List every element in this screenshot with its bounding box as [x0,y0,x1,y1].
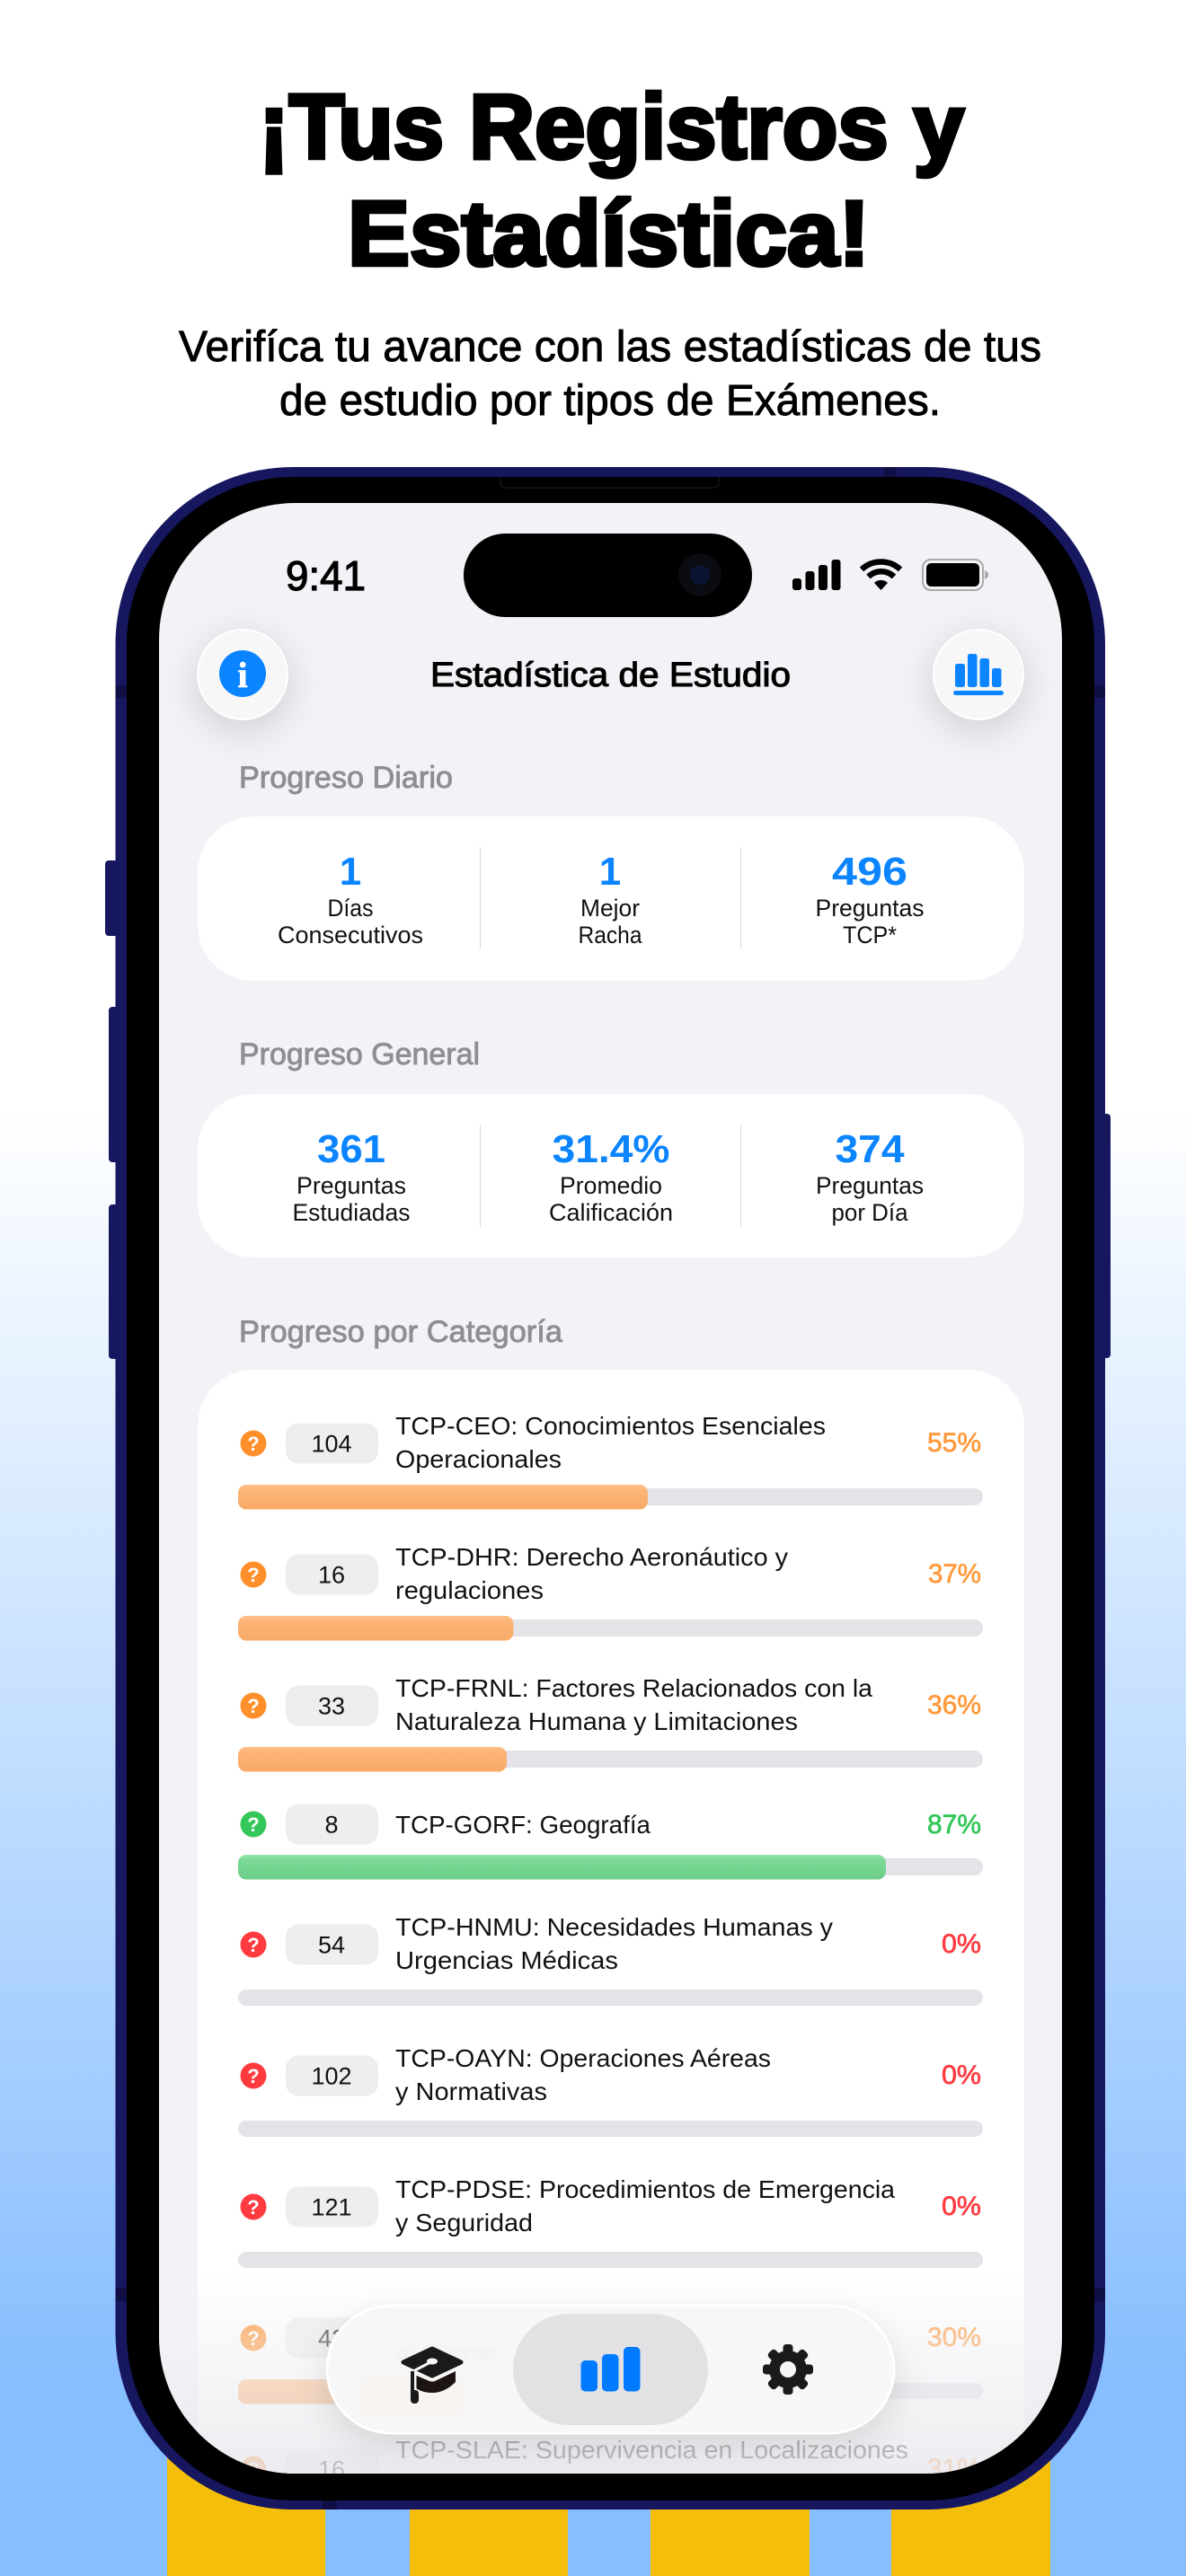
row: TCP-FRNL: Naturaleza Humana y Limitaciones [395,1707,798,1735]
info button [196,630,289,731]
panel: progreso por categoria [198,1370,1024,2537]
icon: wifi [862,562,900,590]
row: TCP-FRNL [238,1674,983,1771]
row: TCP-HNMU: Urgencias Médicas [395,1946,618,1974]
row: TCP-CEO: 104 [311,1430,352,1457]
panel: progreso general: 361 [317,1127,385,1171]
panel: progreso general [198,1094,1024,1257]
row: TCP-DHR: 16 [318,1561,345,1588]
subtitle: de estudio por tipos de Exámenes. [279,377,941,425]
row: TCP-OAYN [238,2044,983,2137]
row: TCP-CEO: 55% [927,1428,981,1458]
icon: signal [792,560,841,590]
row: TCP-SLAE: ? [247,2458,260,2481]
panel: progreso diario: 1 [340,850,361,894]
row: TCP-DHR: 37% [928,1559,981,1589]
row: TCP-OAYN: 102 [311,2062,352,2089]
panel: progreso general: 31.4% [552,1127,670,1171]
phone side buttons [105,860,1111,1359]
row: partially hidden category [238,2317,983,2404]
row: TCP-DHR: TCP-DHR: Derecho Aeronáutico y [395,1543,788,1571]
row: TCP-OAYN: ? [247,2065,260,2087]
row: TCP-GORF [238,1804,983,1879]
panel: progreso diario: TCP* [843,922,897,948]
phone screen [159,503,1062,2537]
dynamic island [464,534,752,617]
panel: progreso diario: 1 [599,850,621,894]
panel: progreso diario: Mejor [580,895,640,922]
row: TCP-CEO: ? [247,1433,260,1455]
panel: progreso general: por Día [832,1199,908,1226]
row: TCP-DHR: regulaciones [395,1576,544,1604]
row: TCP-CEO [238,1412,983,1509]
row: partially hidden category: 30% [927,2323,981,2352]
row: TCP-FRNL: 33 [318,1692,345,1719]
row: TCP-GORF: ? [247,1813,260,1836]
statistics button [932,630,1025,731]
row: TCP-SLAE: 16 [318,2456,345,2483]
title: Estadística! [348,182,870,285]
panel: progreso general: Preguntas [296,1172,406,1199]
panel: progreso diario: Días [327,895,374,922]
phone frame [115,467,1105,2510]
row: TCP-OAYN: TCP-OAYN: Operaciones Aéreas [395,2044,771,2072]
row: TCP-FRNL: TCP-FRNL: Factores Relacionados con la [395,1674,872,1702]
row: TCP-SLAE: 31% [927,2454,981,2483]
title [259,75,964,285]
bottom fade [159,2325,1062,2474]
panel: progreso general: Preguntas [816,1172,924,1199]
panel: progreso general: Promedio [560,1172,662,1199]
icon: battery [923,560,988,590]
panel: progreso diario [198,816,1024,981]
row: TCP-GORF: 87% [927,1810,981,1839]
row: TCP-PDSE: ? [247,2196,260,2219]
row: TCP-DHR [238,1543,983,1640]
panel: progreso general: Calificación [549,1199,673,1226]
heading: progreso diario: Progreso Diario [239,761,453,795]
row: TCP-OAYN: y Normativas [395,2078,547,2105]
row: TCP-HNMU: 0% [942,1929,981,1959]
row: TCP-HNMU [238,1913,983,2006]
selected tab background [513,2314,708,2425]
panel: progreso general: Estudiadas [293,1199,410,1226]
status bar time: 9:41 [286,552,366,599]
heading: progreso general: Progreso General [239,1037,480,1072]
panel: progreso diario: Preguntas [816,895,924,922]
row: partially hidden category: 42 [318,2325,345,2351]
tab bar: al Cliente [396,2339,498,2366]
row: TCP-SLAE [243,2440,978,2474]
panel: progreso general: 374 [836,1127,905,1171]
row: TCP-SLAE: TCP-SLAE: Supervivencia en Localizaciones [395,2436,908,2464]
title: ¡Tus Registros y [259,75,964,178]
row: partially hidden category: ? [247,2327,260,2350]
row: TCP-PDSE: TCP-PDSE: Procedimientos de Emergencia [395,2175,895,2203]
row: TCP-OAYN: 0% [942,2060,981,2090]
row: TCP-HNMU: TCP-HNMU: Necesidades Humanas y [395,1913,833,1941]
row: TCP-GORF: TCP-GORF: Geografía [395,1811,651,1839]
row: TCP-PDSE: y Seguridad [395,2209,533,2236]
icon: graduation cap [403,2349,461,2404]
icon: settings gear [763,2344,813,2395]
subtitle: Verifíca tu avance con las estadísticas de tus [179,323,1041,371]
row: TCP-PDSE: 0% [942,2192,981,2221]
row: TCP-FRNL: 36% [927,1690,981,1720]
decorative yellow stripes [167,2335,1050,2576]
heading: progreso por categoria: Progreso por Categoría [239,1315,562,1349]
subtitle [179,323,1041,425]
row: TCP-FRNL: ? [247,1695,260,1717]
row: TCP-HNMU: ? [247,1934,260,1956]
panel: progreso diario: Racha [579,922,642,948]
icon: bar chart tab [580,2347,640,2391]
info button: i [237,655,248,695]
row: TCP-GORF: 8 [324,1811,339,1838]
row: TCP-DHR: ? [247,1564,260,1586]
row: TCP-CEO: TCP-CEO: Conocimientos Esenciales [395,1412,826,1440]
row: TCP-CEO: Operacionales [395,1445,562,1473]
row: TCP-PDSE [238,2175,983,2268]
row: TCP-HNMU: 54 [318,1931,345,1958]
panel: progreso diario: 496 [832,850,907,894]
row: TCP-PDSE: 121 [311,2193,352,2220]
tab bar [327,2306,894,2442]
panel: progreso diario: Consecutivos [278,922,423,948]
screen heading: Estadística de Estudio [430,657,791,694]
